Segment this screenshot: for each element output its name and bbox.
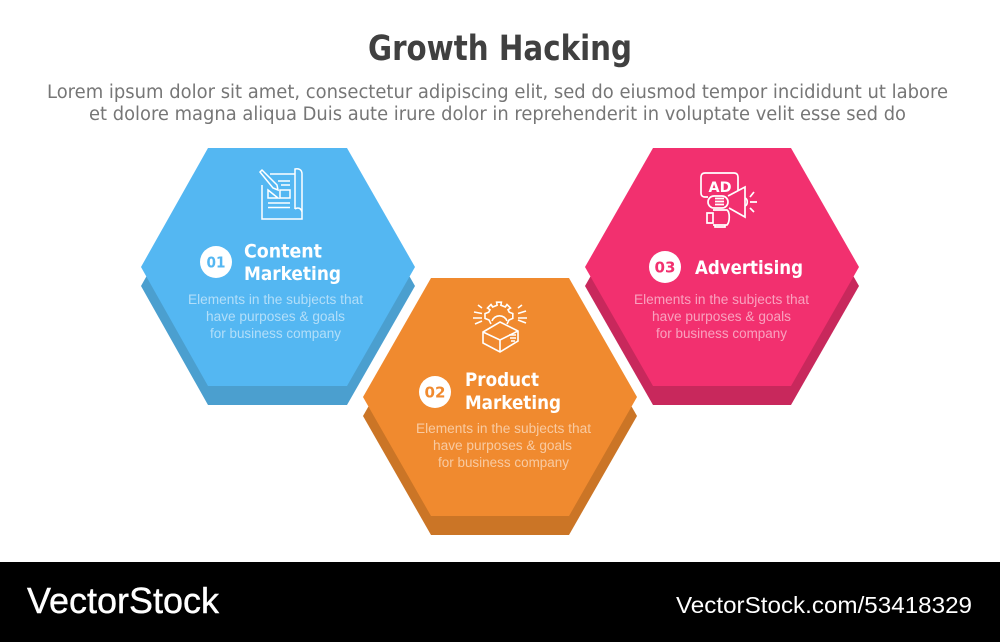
panel: content marketing [141,148,415,405]
heading: content marketing: Marketing [244,263,341,285]
description [634,292,809,341]
hexagon: blue face [141,148,415,386]
hexagon: blue shadow [141,167,415,405]
description: for business company [656,326,787,341]
number badge 02 [419,376,451,408]
hexagon: orange shadow [363,297,637,535]
number badge 01 [200,246,232,278]
number badge 02: 02 [424,384,446,402]
heading: product marketing: Product [465,369,539,391]
description: have purposes & goals [652,309,791,324]
heading: product marketing [465,369,561,414]
description [416,421,591,470]
number badge 03: 03 [654,258,676,276]
panel: product marketing [363,278,637,535]
subtitle text: Lorem ipsum dolor sit amet, consectetur adipiscing elit, sed do eiusmod tempor incididunt ut labore [47,82,948,103]
number badge 03 [649,251,681,283]
heading: content marketing: Content [244,240,322,262]
icon: AD megaphone [701,173,757,227]
title: Growth Hacking [368,29,632,69]
icon: gear and box [473,302,527,352]
hexagon: pink shadow [585,167,859,405]
footer brand: VectorStock [27,580,220,621]
footer image id: VectorStock.com/53418329 [676,592,972,618]
hexagon: orange face [363,278,637,516]
subtitle text [47,82,948,125]
icon: document and pencil [260,169,302,219]
description: Elements in the subjects that [416,421,591,436]
hexagon: pink face [585,148,859,386]
description: for business company [438,455,569,470]
footer bar [0,562,1000,642]
description: for business company [210,326,341,341]
description: have purposes & goals [206,309,345,324]
heading: content marketing [244,240,341,285]
description: Elements in the subjects that [188,292,363,307]
description: have purposes & goals [433,438,572,453]
subtitle text: et dolore magna aliqua Duis aute irure dolor in reprehenderit in voluptate velit esse sed do [89,104,906,125]
heading: advertising: Advertising [695,257,803,279]
description [188,292,363,341]
heading: product marketing: Marketing [465,392,561,414]
number badge 01: 01 [206,254,226,272]
description: Elements in the subjects that [634,292,809,307]
panel: advertising [585,148,859,405]
icon: AD megaphone: AD [708,180,732,196]
